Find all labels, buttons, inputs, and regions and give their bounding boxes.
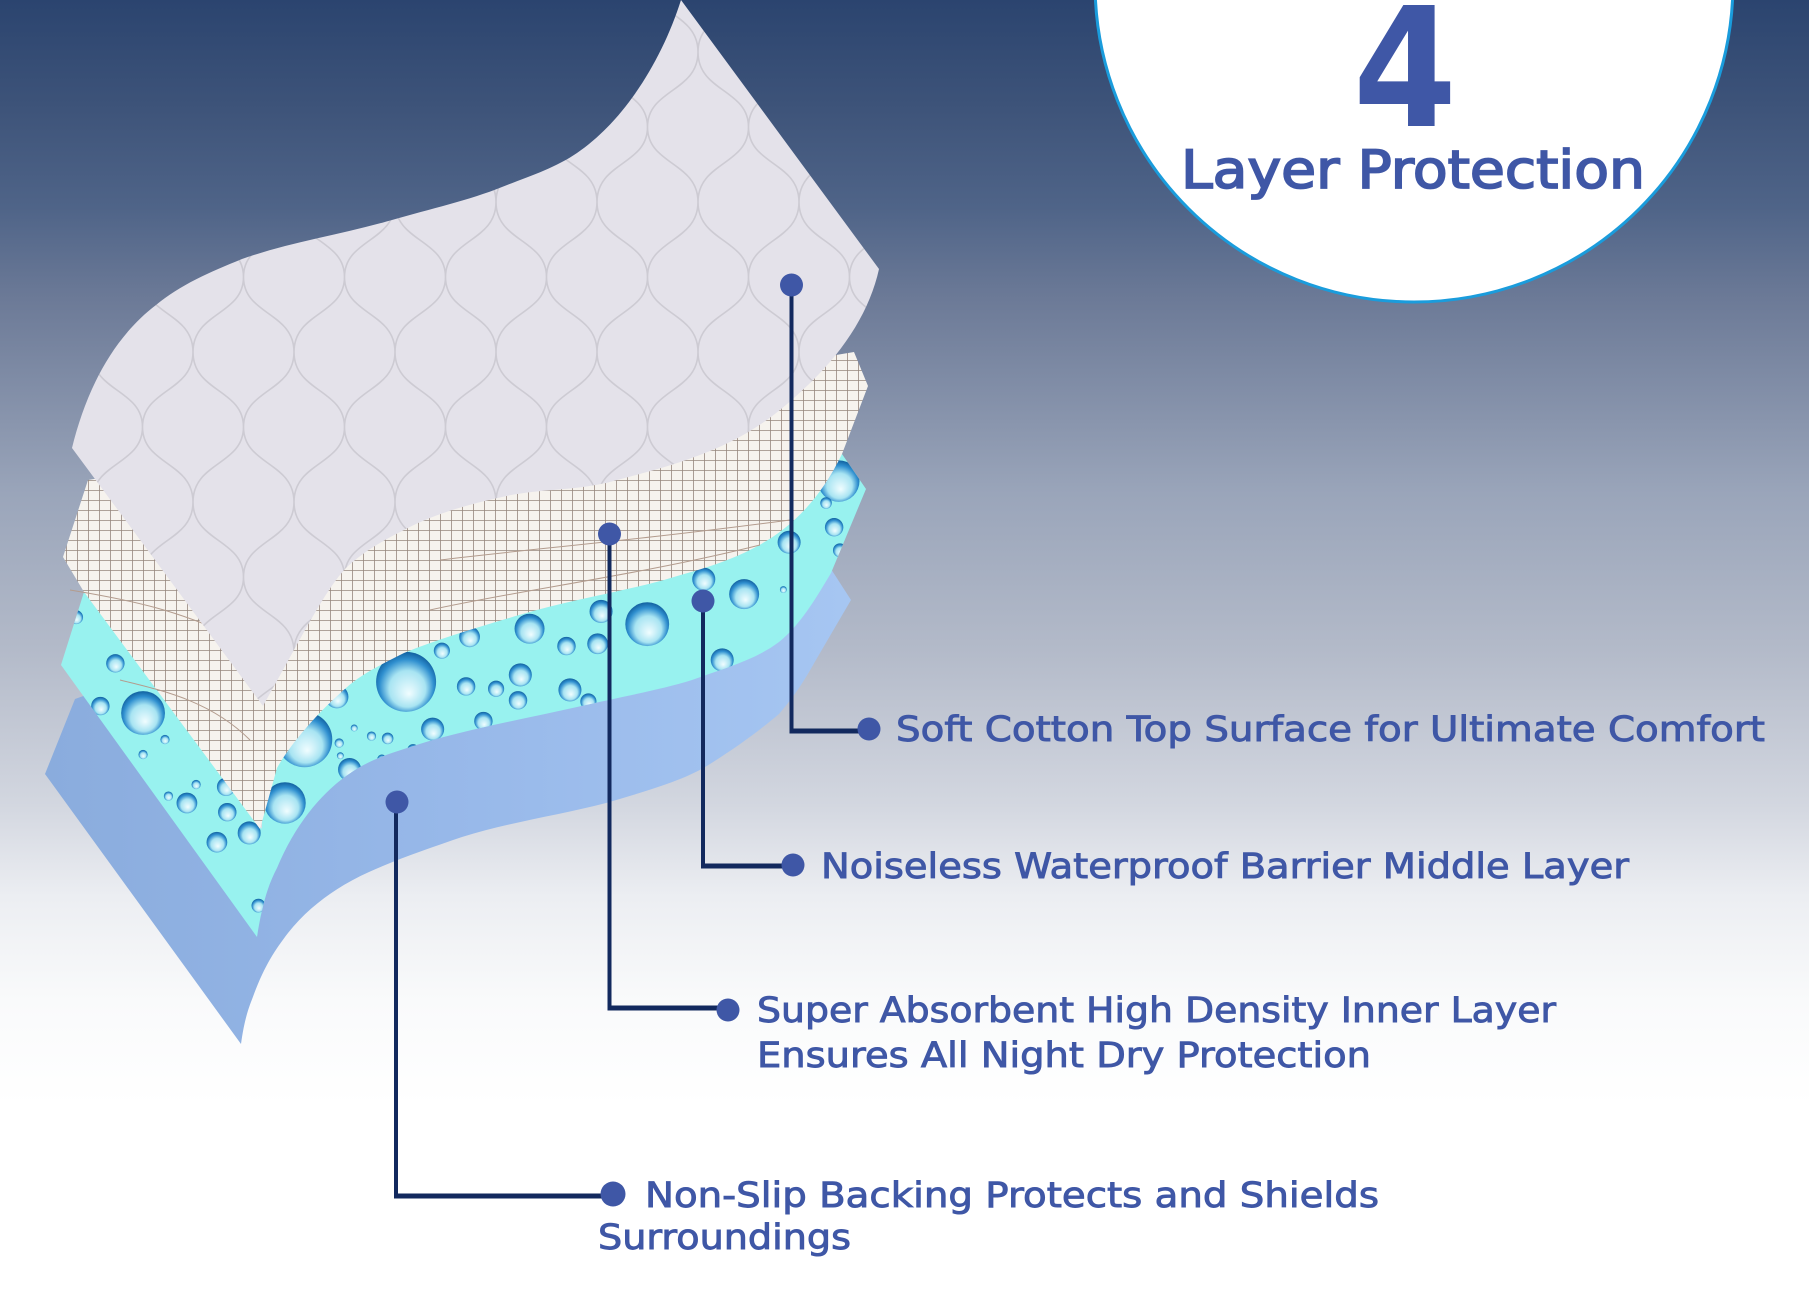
callout: non-slip backing	[386, 790, 1379, 1258]
callout: absorbent inner layer: Ensures All Night Dry Protection	[757, 1036, 1371, 1076]
callout: non-slip backing: Surroundings	[598, 1218, 851, 1258]
layer illustration	[45, 0, 879, 1044]
callout: waterproof middle layer: Noiseless Waterproof Barrier Middle Layer	[821, 847, 1630, 887]
callout: non-slip backing: Non-Slip Backing Protects and Shields	[645, 1176, 1379, 1216]
callout: waterproof middle layer	[692, 590, 1630, 887]
badge heading: Layer Protection	[1181, 140, 1645, 201]
layer: aqua waterproof barrier with water drops	[61, 454, 866, 937]
callout: absorbent inner layer	[598, 522, 1557, 1076]
layer: absorbent mesh	[63, 352, 868, 829]
callout: absorbent inner layer: Super Absorbent High Density Inner Layer	[757, 991, 1557, 1031]
layer: blue non-slip backing	[45, 569, 851, 1044]
badge circle	[1095, 0, 1733, 302]
layer: quilted cotton top	[72, 0, 879, 706]
callout: soft cotton top: Soft Cotton Top Surface for Ultimate Comfort	[896, 710, 1765, 750]
callout: soft cotton top	[780, 274, 1765, 750]
